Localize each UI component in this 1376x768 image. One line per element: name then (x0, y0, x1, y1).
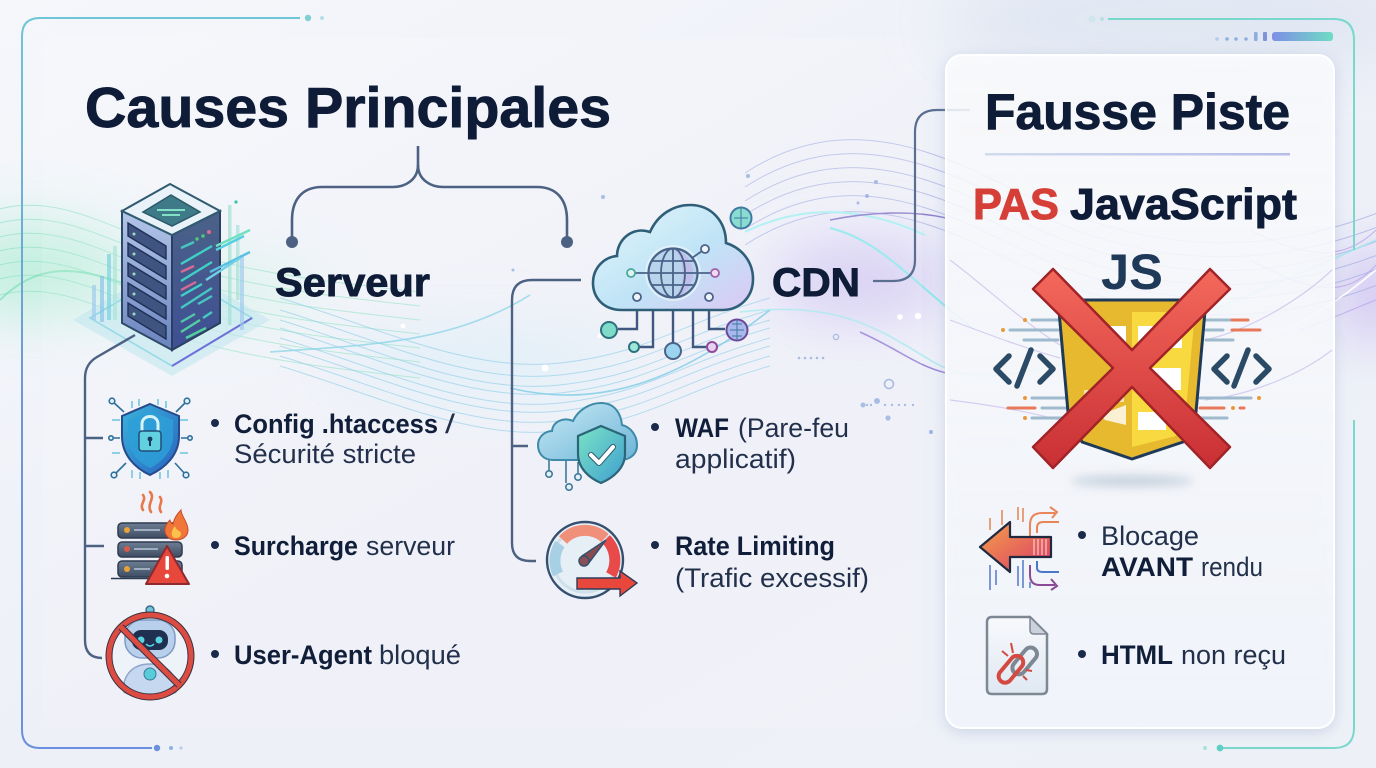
icon: overloaded server with fire and warning (111, 492, 189, 584)
text: WAF (Pare-feu applicatif) (675, 413, 849, 474)
text: Surcharge serveur: Surcharge (234, 531, 358, 561)
bullet: HTML (1078, 650, 1086, 658)
bullet: User-Agent (211, 650, 219, 658)
text: Surcharge serveur (234, 531, 455, 561)
subheading: PAS JavaScript: PAS (973, 180, 1059, 229)
outer frame: right side (1088, 15, 1354, 751)
text: Blocage AVANT rendu (1101, 521, 1263, 582)
icon: isometric server (73, 184, 270, 376)
icon: WAF cloud with shield (538, 403, 637, 490)
text: User-Agent bloqué: User-Agent (234, 640, 372, 670)
text: User-Agent bloqué: bloqué (379, 640, 461, 670)
subheading: PAS JavaScript: JavaScript (1070, 180, 1297, 229)
text: Surcharge serveur: serveur (366, 531, 455, 561)
heading: CDN: CDN (772, 261, 860, 305)
icon: document with broken link (987, 617, 1047, 694)
text: Config .htaccess (234, 409, 456, 469)
icon: crossed-out JavaScript shield (996, 244, 1269, 486)
icon: arrow with blocked data flows (980, 507, 1059, 590)
text: HTML non reçu: HTML (1101, 640, 1173, 670)
text: Rate Limiting (Trafic excessif) (675, 531, 869, 593)
bullet: Config (211, 419, 219, 427)
connector: server to list (85, 335, 135, 658)
connector: CDN to Fausse Piste (873, 110, 970, 281)
background colour glows and flowing wave lines (0, 0, 1376, 434)
icon: blocked robot (109, 606, 191, 697)
bullet: Rate Limiting (651, 541, 659, 549)
text: Config .htaccess: Config .htaccess (234, 409, 438, 439)
text: Blocage AVANT rendu: AVANT (1101, 552, 1194, 582)
text: Blocage AVANT rendu: Blocage (1101, 521, 1199, 551)
text: Blocage AVANT rendu: rendu (1201, 552, 1263, 582)
heading: Serveur: Serveur (275, 261, 430, 305)
connector: CDN to list (512, 280, 581, 561)
text: Rate Limiting (Trafic excessif): Rate Limiting (675, 531, 835, 561)
text: WAF (Pare-feu applicatif): WAF (675, 413, 729, 443)
text: HTML non reçu: non reçu (1181, 640, 1286, 670)
text: WAF (Pare-feu applicatif): (Pare-feu (738, 413, 849, 443)
heading: Fausse Piste: Fausse Piste (985, 84, 1290, 140)
text: User-Agent bloqué (234, 640, 461, 670)
icon: security shield with padlock (109, 398, 192, 479)
text: HTML non reçu (1101, 640, 1286, 670)
text: WAF (Pare-feu applicatif): applicatif) (675, 444, 796, 474)
bullet: Blocage (1078, 531, 1086, 539)
bullet: WAF (651, 423, 659, 431)
outer frame: left side (22, 15, 922, 751)
panel: Fausse Piste (946, 55, 1334, 728)
text: Rate Limiting (Trafic excessif): (Trafic excessif) (675, 563, 869, 593)
bullet: Surcharge (211, 541, 219, 549)
text: Config .htaccess: Sécurité stricte (234, 439, 416, 469)
bracket from title to Serveur and CDN (286, 146, 573, 248)
icon: rate limiting gauge (547, 522, 637, 598)
title: Causes Principales: Causes Principales (85, 76, 611, 140)
subheading: PAS JavaScript (973, 180, 1297, 229)
icon: crossed-out JavaScript shield: JS (1101, 244, 1163, 300)
text: Config .htaccess: / (445, 409, 456, 439)
icon: CDN cloud network (593, 205, 753, 359)
